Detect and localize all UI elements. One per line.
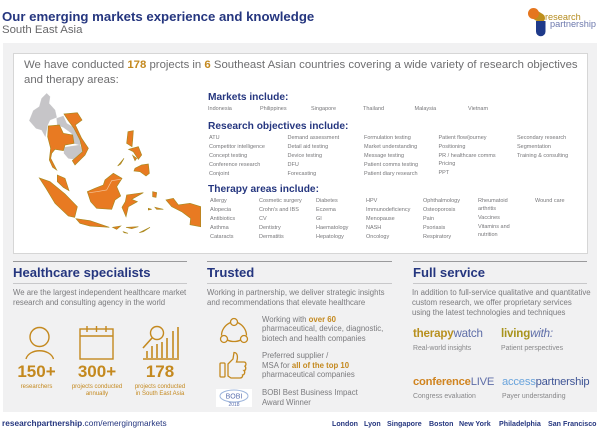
list: research objectives: Patient diary research [364,170,418,176]
list: therapy areas: Respiratory [423,234,451,240]
list: therapy areas: nutrition [478,232,498,238]
icon: calendar [79,326,114,360]
service: conferenceLIVE: conferenceLIVE [413,376,494,388]
service: therapywatch: Real-world insights [413,345,471,352]
service: therapywatch: therapywatch [413,327,483,340]
list: research objectives: Market understanding [364,144,417,150]
list: therapy areas: Pain [423,216,434,222]
list: research objectives: Positioning [438,144,465,150]
intro text: and therapy areas: [24,74,119,86]
list: therapy areas: Psoriasis [423,225,445,231]
text: over 60: pharmaceutical, device, diagnostic, [262,324,383,333]
list: therapy areas: Dermatitis [259,234,284,240]
logo: research partnership: partnership [550,19,596,29]
stat: researchers: 150+ [17,362,56,381]
heading: therapy areas: Therapy areas include: [208,184,319,195]
text: over 60: Working with over 60 [262,314,336,324]
badge: BOBI 2018: BOBI [226,394,242,400]
service: therapywatch [413,327,483,352]
footer: office locations: Lyon [364,420,381,428]
list: markets [208,106,488,112]
list: research objectives: Concept testing [209,153,247,159]
list: therapy areas: Crohn's and IBS [259,207,299,213]
list: therapy areas: Ophthalmology [423,198,460,204]
list: research objectives: PPT [438,170,449,176]
description [13,288,186,307]
service: accesspartnership [502,376,590,400]
list: therapy areas: Wound care [535,198,565,204]
list: therapy areas: Menopause [366,216,395,222]
stat: projects South East Asia: 178 [146,362,174,381]
stat: projects annually: projects conducted [72,384,122,390]
service: accesspartnership: accesspartnership [502,376,589,388]
stat: researchers: researchers [21,384,52,390]
icon: thumbs up [219,352,247,379]
badge: BOBI 2018 [216,389,252,407]
text: top 10: MSA for all of the top 10 [262,360,349,370]
description: using the latest technologies and techniques [412,308,565,317]
list: research objectives: Patient comms testing [364,162,418,168]
service: livingwith [501,327,563,352]
text: BOBI award [262,388,358,406]
icon: person [25,326,54,360]
footer: office locations: New York [459,420,491,428]
list: therapy areas: Dentistry [259,225,281,231]
panel: trusted [207,261,392,407]
text: BOBI award: BOBI Best Business Impact [262,388,358,397]
subtitle: South East Asia [2,24,82,36]
list: markets: Thailand [363,106,384,112]
service: accesspartnership: Payer understanding [502,392,566,400]
footer: website: researchpartnership.com/emergingmarkets [2,418,167,428]
description: research and consulting agency in the world [13,298,165,307]
title: Our emerging markets experience and knowledge [2,8,314,24]
list: markets: Philippines [260,106,287,112]
icon: magnifier chart [142,326,179,360]
list: research objectives: PR / healthcare comms [438,152,496,158]
text: over 60 [262,314,383,342]
stat: projects South East Asia: projects conducted [135,384,185,390]
description: custom research, we offer proprietary services [412,298,572,307]
list: therapy areas: Allergy [210,198,227,204]
list: therapy areas: NASH [366,225,381,231]
text: top 10: pharmaceutical companies [262,370,355,379]
intro text [24,59,578,86]
list: research objectives: Patient flow/journey [438,135,486,141]
description [412,288,591,317]
list: therapy areas: arthritis [478,206,496,212]
list: therapy areas: Rheumatoid [478,198,508,204]
list: therapy areas: HPV [366,198,377,204]
service: livingwith: livingwith: [501,327,553,340]
intro text: We have conducted 178 projects in 6 Southeast Asian countries covering a wide variety of research objectives [24,59,578,71]
list: therapy areas: Asthma [210,225,229,231]
list: research objectives: Competitor intelligence [209,144,265,150]
list: therapy areas [210,198,565,240]
list: therapy areas: Vaccines [478,215,500,221]
stat: projects annually: annually [86,391,108,397]
text: top 10 [262,351,355,379]
list: therapy areas: GI [316,216,322,222]
stat: projects annually: 300+ [78,362,116,381]
list: research objectives [209,135,568,177]
footer: office locations: Singapore [387,420,422,428]
text: top 10: Preferred supplier / [262,351,328,360]
heading: Full service [413,265,485,280]
description [207,288,385,307]
logo: research partnership: research [545,12,581,22]
panel: experience overview [13,53,588,254]
list: research objectives: Conference research [209,162,260,168]
text: BOBI award: Award Winner [262,398,311,406]
footer: office locations [332,420,596,428]
description: and recommendations that elevate healthcare [207,298,365,307]
list: therapy areas: Osteoporosis [423,207,455,213]
stat: projects annually [72,362,122,397]
list: research objectives: Conjoint [209,170,229,176]
list: therapy areas: Hepatology [316,234,344,240]
list: therapy areas: Oncology [366,234,389,240]
service: conferenceLIVE: Congress evaluation [413,392,476,400]
footer: office locations: Philadelphia [499,420,541,428]
panel: healthcare specialists [13,261,187,397]
heading: Healthcare specialists [13,265,151,280]
heading: research objectives: Research objectives include: [208,120,348,132]
list: therapy areas: Alopecia [210,207,231,213]
panel: full service [412,261,591,400]
stat: researchers [17,362,56,390]
list: research objectives: Message testing [364,153,404,159]
list: research objectives: Device testing [288,153,322,159]
stat: projects South East Asia [135,362,185,397]
list: therapy areas: Cosmetic surgery [259,198,302,204]
list: markets: Malaysia [414,106,436,112]
list: therapy areas: Eczema [316,207,336,213]
list: research objectives: Segmentation [517,144,551,150]
list: research objectives: Formulation testing [364,135,411,141]
text: over 60: biotech and health companies [262,334,366,342]
list: research objectives: Pricing [438,161,455,167]
list: therapy areas: Antibiotics [210,216,235,222]
list: research objectives: Secondary research [517,135,566,141]
footer: office locations: Boston [429,420,453,428]
map of South East Asia [29,93,201,234]
list: research objectives: Detail aid testing [288,144,328,150]
service: conferenceLIVE [413,376,494,400]
description: Working in partnership, we deliver strategic insights [207,288,385,297]
list: research objectives: Forecasting [288,171,316,177]
heading: markets: Markets include: [208,92,288,103]
list: therapy areas: Cataracts [210,234,234,240]
footer: office locations: San Francisco [548,420,596,428]
footer: office locations: London [332,420,358,428]
list: research objectives: DFU [288,162,299,168]
list: therapy areas: Diabetes [316,198,338,204]
list: research objectives: ATU [209,135,220,141]
list: markets: Indonesia [208,106,232,112]
list: markets: Singapore [311,106,336,112]
service: livingwith: Patient perspectives [501,345,563,352]
list: therapy areas: Haematology [316,225,348,231]
description: In addition to full-service qualitative and quantitative [412,288,591,297]
description: We are the largest independent healthcare market [13,288,186,297]
logo: research partnership [528,8,596,36]
list: markets: Vietnam [468,106,488,112]
list: research objectives: Demand assessment [288,135,339,141]
heading: Trusted [207,265,254,280]
icon: network [220,318,248,344]
list: therapy areas: CV [259,216,267,222]
list: therapy areas: Immunodeficiency [366,207,410,213]
list: therapy areas: Vitamins and [478,224,510,230]
list: research objectives: Training & consulting [517,153,568,159]
stat: projects South East Asia: in South East Asia [136,391,184,397]
